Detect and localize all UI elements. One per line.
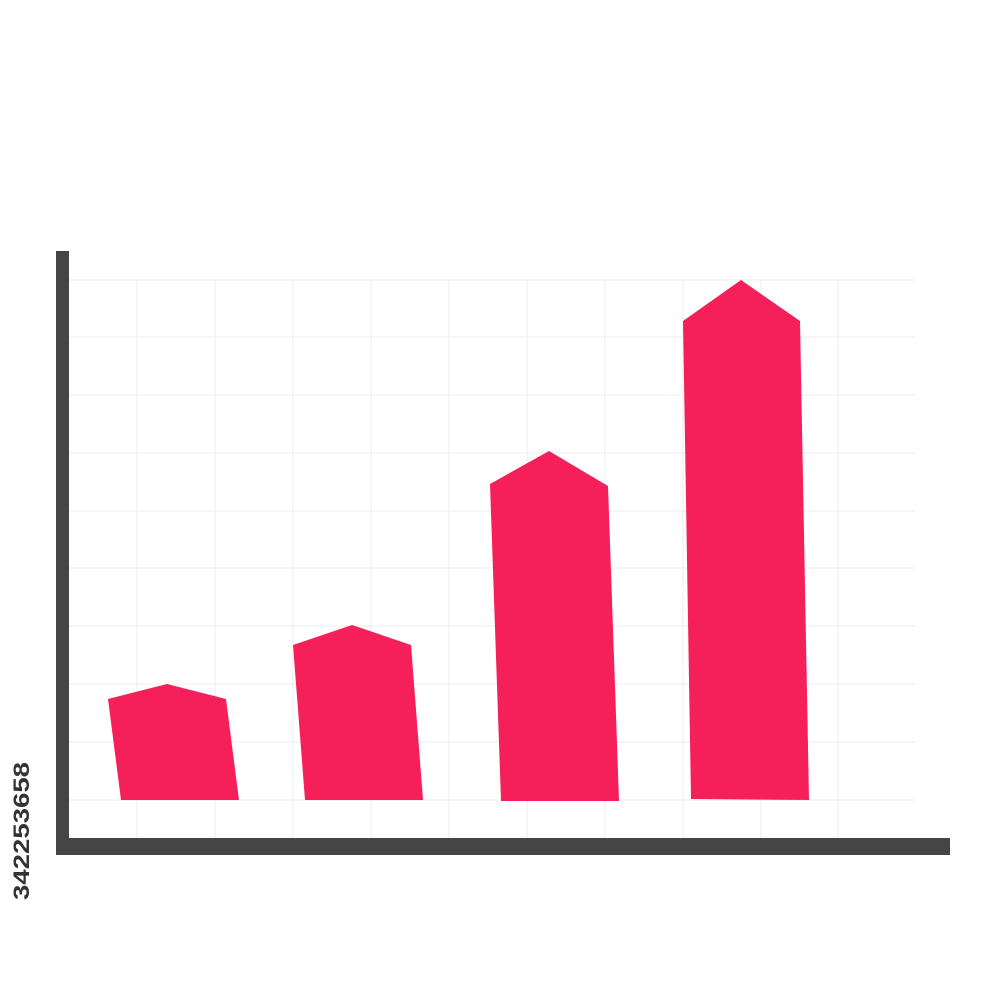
bar 2 bbox=[293, 625, 423, 800]
side id text: 342253658 bbox=[9, 762, 34, 900]
bar 4 bbox=[683, 280, 809, 800]
bar 3 bbox=[490, 451, 619, 801]
bars bbox=[108, 280, 809, 801]
bar 1 bbox=[108, 684, 239, 800]
axes bbox=[56, 251, 950, 855]
